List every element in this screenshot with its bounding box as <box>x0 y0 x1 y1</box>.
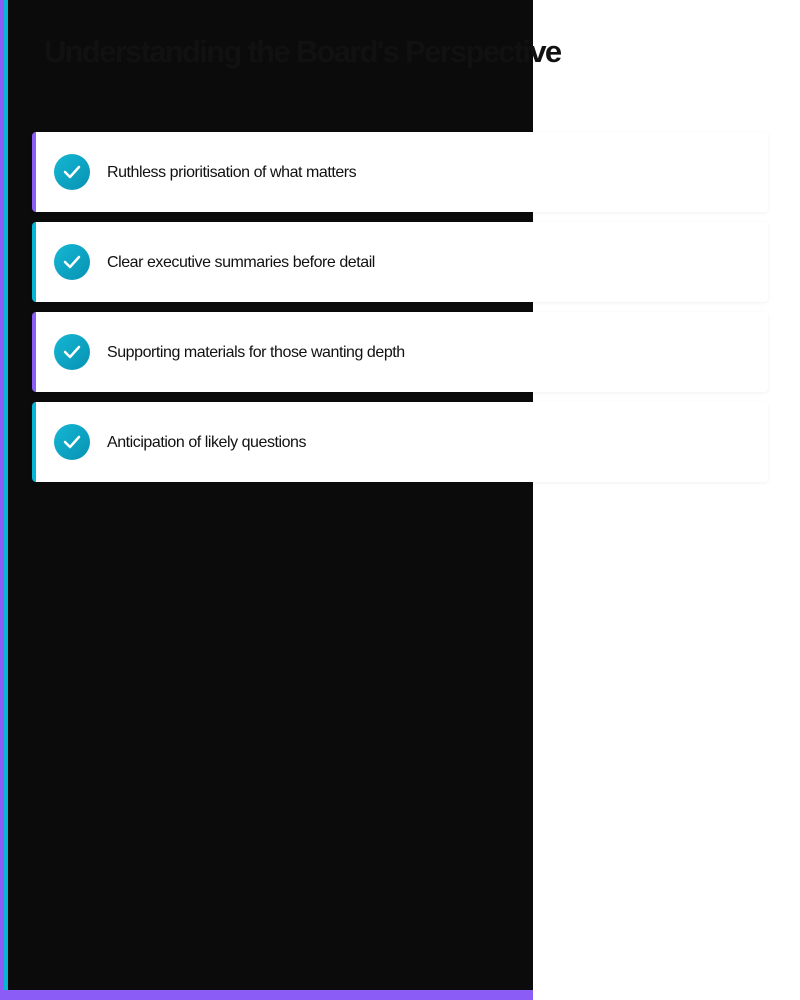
text: Supporting materials for those wanting depth <box>107 344 405 361</box>
icon: check <box>54 154 90 190</box>
text: Anticipation of likely questions <box>107 434 306 451</box>
card: anticipation <box>32 402 768 482</box>
card: prioritisation <box>32 132 768 212</box>
card: summaries <box>32 222 768 302</box>
icon: check <box>54 244 90 280</box>
card: supporting materials <box>32 312 768 392</box>
text: Clear executive summaries before detail <box>107 254 375 271</box>
icon: check <box>54 334 90 370</box>
text: Ruthless prioritisation of what matters <box>107 164 356 181</box>
icon: check <box>54 424 90 460</box>
title: Understanding the Board's Perspective <box>44 34 560 69</box>
